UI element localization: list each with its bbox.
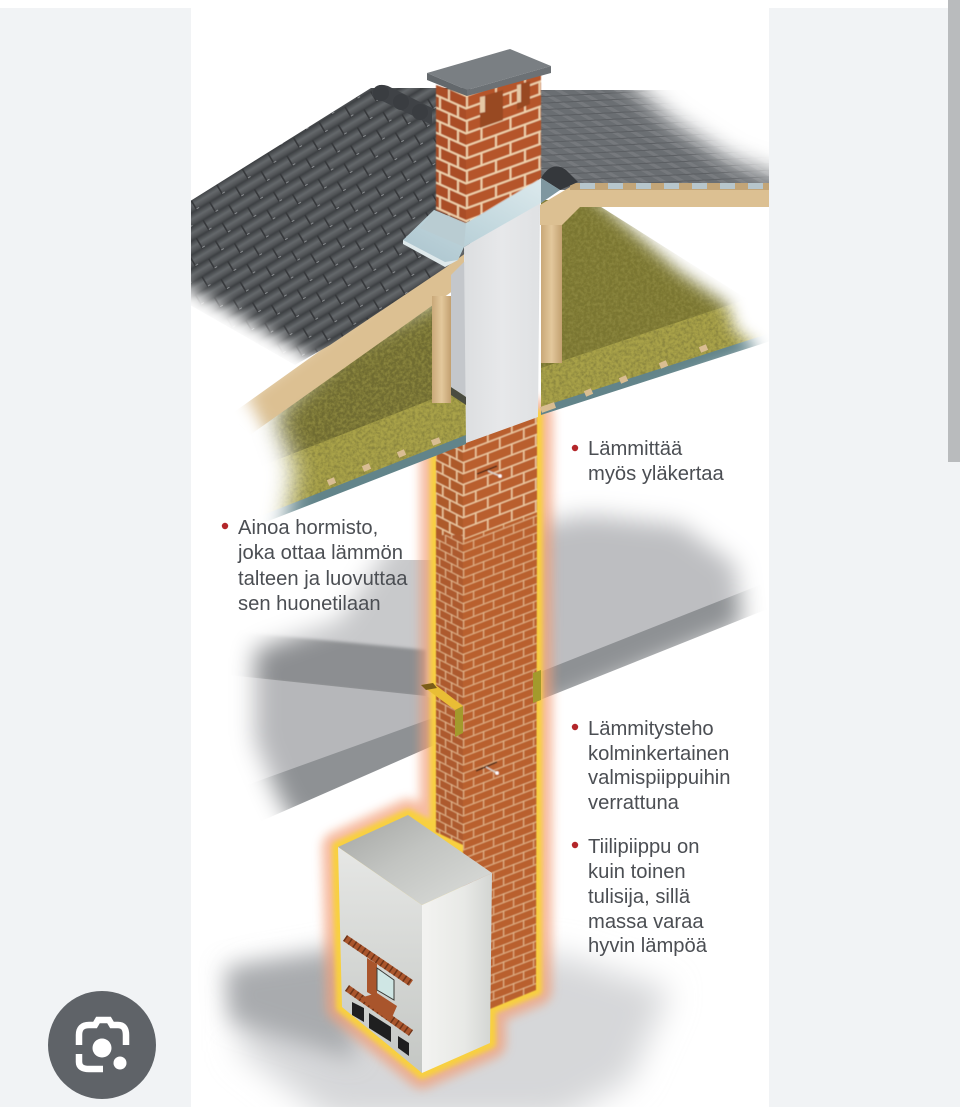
scrollbar <box>948 0 960 462</box>
top white strip <box>0 0 960 8</box>
text: brick chimney stores heat: kuin toinen <box>588 861 686 883</box>
text: only flue system <box>222 517 408 615</box>
cleaning door right <box>398 1036 409 1056</box>
floor penetration details <box>421 670 541 737</box>
text: brick chimney stores heat <box>572 836 708 957</box>
flue hatch upper <box>477 466 502 478</box>
text: only flue system: talteen ja luovuttaa <box>238 568 408 590</box>
chimney cap <box>427 49 551 96</box>
text: brick chimney stores heat: massa varaa <box>588 911 704 933</box>
ground shadow under stove <box>225 950 670 1107</box>
text: heating power: kolminkertainen <box>588 743 729 765</box>
text: heats upstairs: Lämmittää <box>588 438 683 460</box>
fire door centre <box>369 1013 391 1042</box>
fireplace window <box>377 968 394 1000</box>
white image panel <box>191 8 769 1107</box>
insulation right <box>541 200 780 415</box>
cleaning door left <box>352 1002 364 1022</box>
vent openings <box>480 81 530 128</box>
roof left tiles <box>191 88 470 364</box>
text: heats upstairs <box>572 438 725 485</box>
stove masonry unit <box>338 815 492 1073</box>
lower brick chimney <box>436 412 537 1020</box>
upper floor slab: right <box>541 503 756 699</box>
roof right <box>538 90 769 190</box>
upper floor slab: left <box>238 560 432 816</box>
text: only flue system: joka ottaa lämmön <box>237 542 403 564</box>
brick column <box>367 958 377 998</box>
text: heating power <box>572 718 731 814</box>
text: brick chimney stores heat: Tiilipiippu on <box>588 836 699 858</box>
icon: camera lens button <box>48 991 156 1099</box>
text: brick chimney stores heat: hyvin lämpöä <box>588 935 708 957</box>
roof left rafter <box>230 248 464 435</box>
upper brick chimney <box>436 73 541 223</box>
lower brick shelf <box>347 988 411 1033</box>
text: heats upstairs: myös yläkertaa <box>588 463 725 485</box>
heat glow around chimney and stove <box>338 415 537 1073</box>
hearth <box>360 993 397 1022</box>
metal flashing <box>403 178 560 267</box>
flue hatch lower <box>476 762 499 775</box>
upper brick shelf <box>345 938 411 983</box>
text: only flue system: Ainoa hormisto, <box>238 517 378 539</box>
text: only flue system: sen huonetilaan <box>238 593 381 615</box>
attic posts <box>432 225 562 403</box>
text: heating power: valmispiippuihin <box>588 767 731 789</box>
text: heating power: Lämmitysteho <box>588 718 714 740</box>
text: heating power: verrattuna <box>588 792 680 814</box>
insulation left <box>260 306 466 521</box>
white insulated chimney section <box>451 203 540 443</box>
roof ridge caps <box>372 85 578 190</box>
right rafter and battens <box>540 183 769 225</box>
text: brick chimney stores heat: tulisija, sillä <box>588 886 691 908</box>
